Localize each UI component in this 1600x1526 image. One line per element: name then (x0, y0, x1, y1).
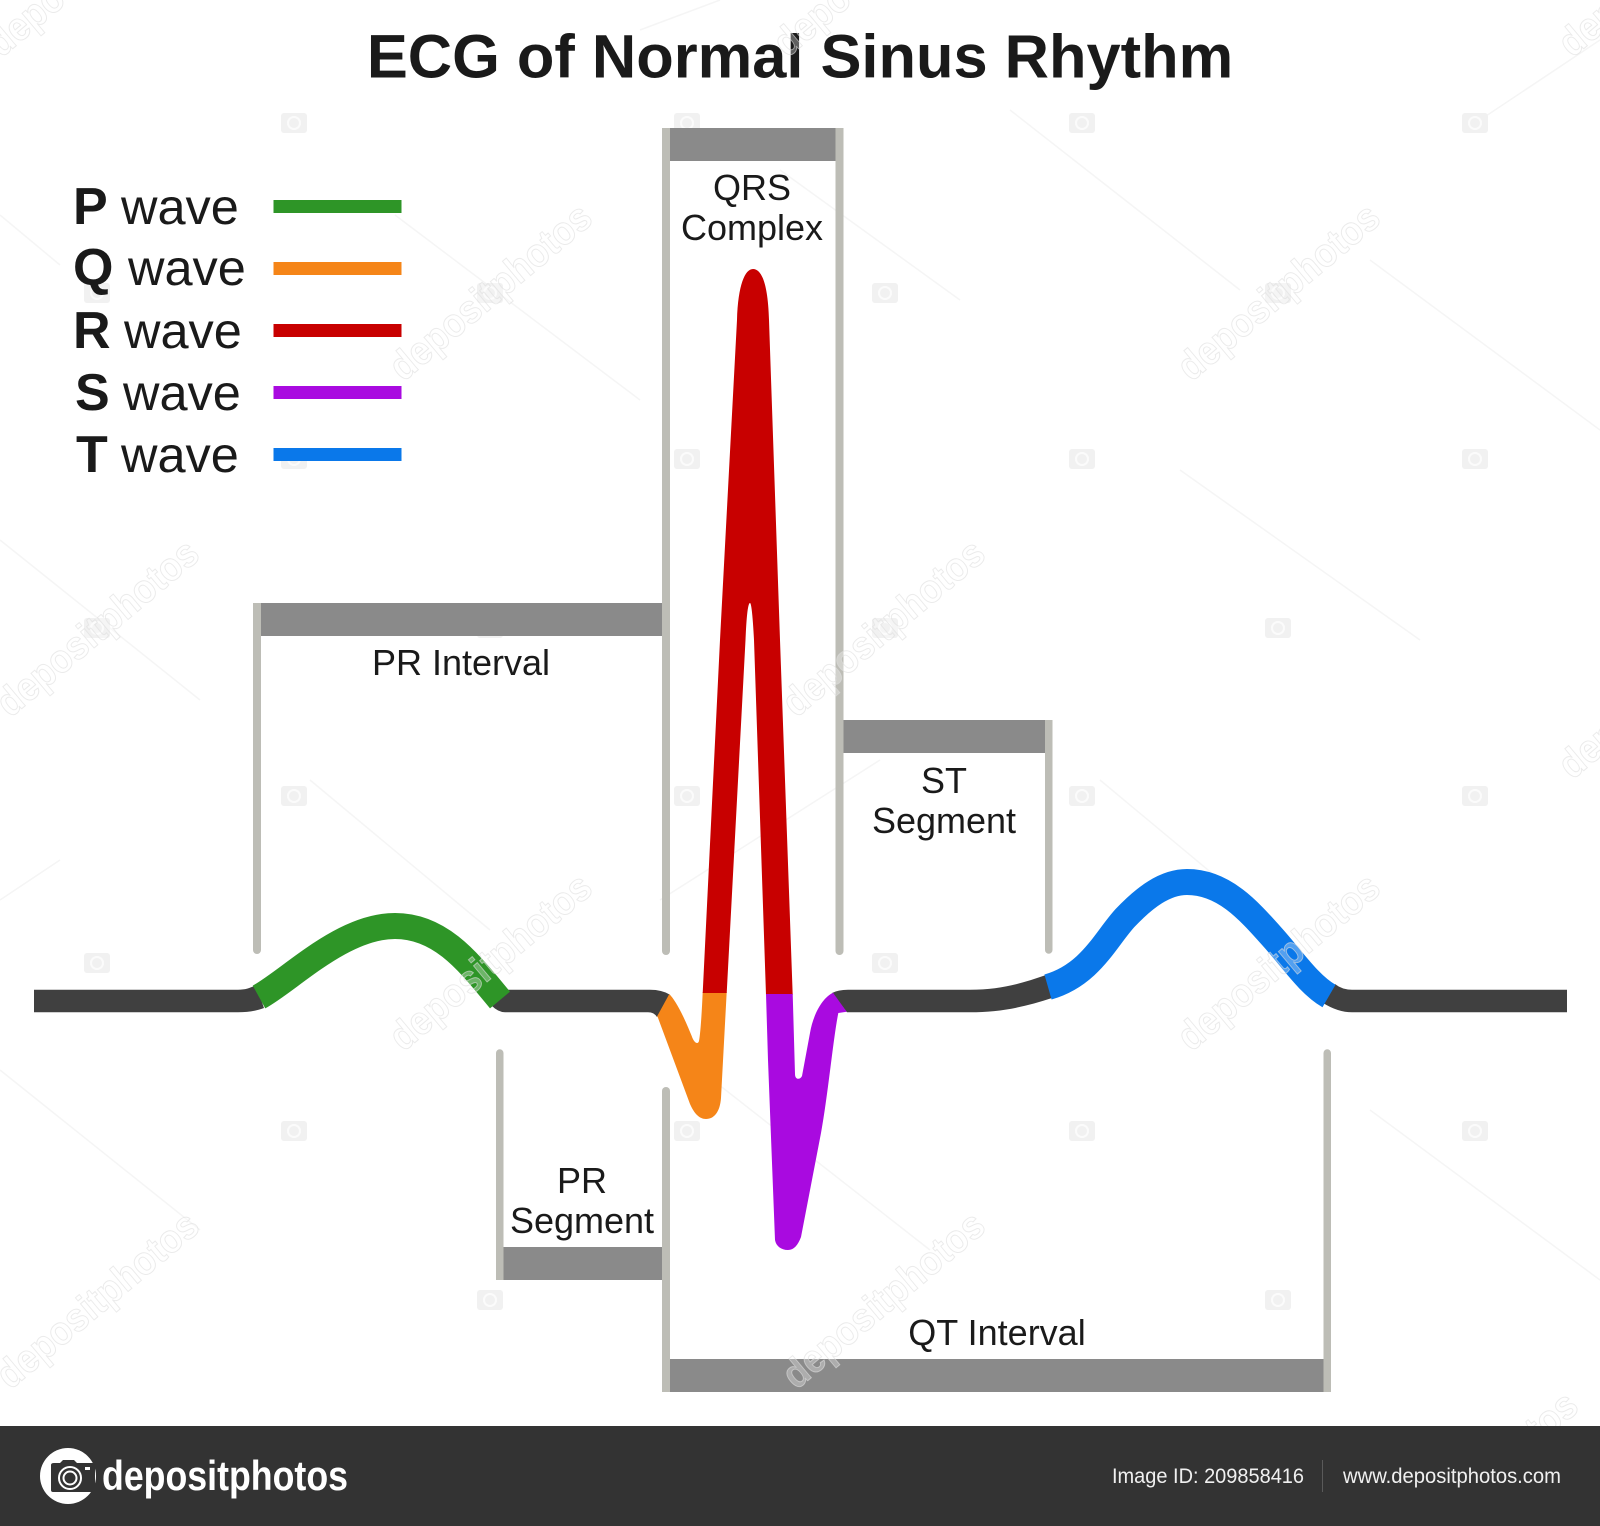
bracket: ST segment (844, 720, 1052, 954)
stock watermark text overlay: depositphotos (1169, 865, 1389, 1059)
R wave (703, 269, 793, 995)
bracket: ST segment: Segment (872, 800, 1016, 841)
legend item: Q wave (73, 239, 402, 297)
ECG trace (34, 269, 1567, 1250)
icon: depositphotos camera logo (40, 1448, 96, 1504)
bracket: QRS complex: Complex (681, 207, 823, 248)
baseline segments (34, 975, 1567, 1017)
legend item: R wave (73, 302, 402, 360)
legend item: P wave: wave (120, 178, 239, 235)
legend item: P wave (73, 178, 402, 236)
Q wave (657, 992, 727, 1119)
legend item: P wave: P (73, 178, 108, 236)
stock watermark text overlay: depositphotos (774, 531, 994, 725)
legend item: R wave: wave (123, 302, 242, 359)
stock watermark text overlay: depositphotos (381, 195, 601, 389)
title: ECG of Normal Sinus Rhythm (367, 22, 1233, 92)
legend item: R wave: R (73, 302, 111, 360)
legend item: Q wave: wave (127, 239, 246, 296)
legend item: S wave: wave (122, 364, 241, 421)
bracket: PR segment: PR (557, 1160, 607, 1201)
legend (73, 178, 402, 484)
stock watermark text overlay: depositphotos (1169, 195, 1389, 389)
legend item: T wave (76, 426, 402, 484)
bracket: QRS complex: QRS (713, 167, 791, 208)
S wave (766, 993, 847, 1250)
bracket: QT interval (662, 1049, 1331, 1392)
website url: www.depositphotos.com (1342, 1465, 1561, 1488)
image id: Image ID: 209858416 (1112, 1465, 1304, 1488)
legend item: S wave (75, 364, 402, 422)
logo wordmark: depositphotos (102, 1452, 348, 1499)
bracket: PR segment: Segment (510, 1200, 654, 1241)
legend item: T wave: wave (120, 426, 239, 483)
T wave (1048, 882, 1329, 996)
stock watermark text overlay: depositphotos (774, 1203, 994, 1397)
bracket: PR interval: PR Interval (372, 642, 550, 683)
legend item: T wave: T (76, 426, 108, 484)
bracket: PR segment (496, 1049, 662, 1280)
P wave (259, 926, 500, 1000)
bracket: QRS complex (662, 128, 844, 955)
footer divider (1322, 1460, 1323, 1492)
footer bar (0, 1426, 1600, 1526)
legend item: S wave: S (75, 364, 110, 422)
bracket: ST segment: ST (921, 760, 967, 801)
bracket: QT interval: QT Interval (908, 1312, 1086, 1353)
legend item: Q wave: Q (73, 239, 113, 297)
bracket: PR interval (253, 603, 662, 954)
stock watermark text overlay: depositphotos (381, 865, 601, 1059)
